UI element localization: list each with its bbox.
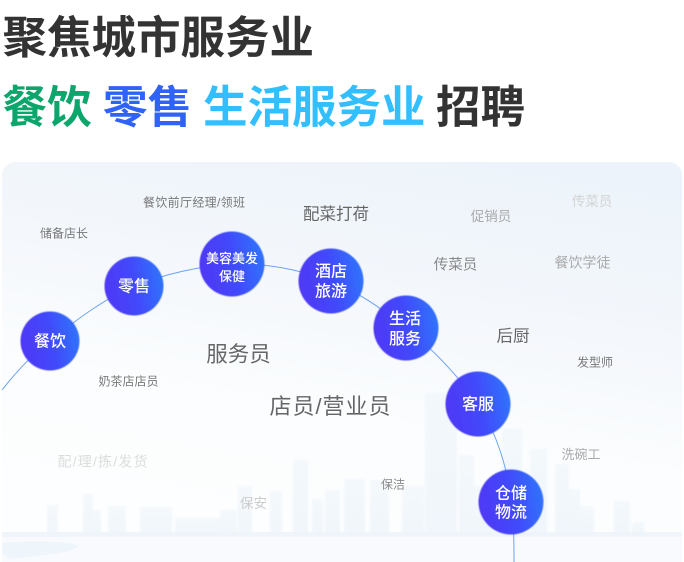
node: warehousing and logistics: [478, 470, 544, 534]
label: warehouse picking and shipping: 配/理/拣/发货: [58, 454, 148, 470]
node: life services: 服务: [389, 330, 421, 348]
node: retail: 零售: [118, 278, 150, 296]
label: catering floor manager: 餐饮前厅经理/领班: [143, 194, 245, 210]
label: sales promoter: 促销员: [471, 209, 511, 224]
illustration: city skyline: [47, 393, 644, 535]
label: milk tea shop staff: 奶茶店店员: [98, 374, 159, 388]
node: life services: [374, 296, 438, 360]
node: beauty and wellness: [200, 232, 264, 296]
node: life services: 生活: [389, 310, 421, 328]
node: retail: [104, 256, 164, 316]
node: customer service: [446, 372, 510, 436]
label: kitchen prep: 配菜打荷: [303, 204, 369, 224]
node: customer service: 客服: [462, 394, 494, 414]
heading word: life services: 生活服务业: [203, 84, 426, 132]
label: hairstylist: 发型师: [577, 354, 613, 370]
job labels: [40, 194, 613, 511]
title: line one: 聚焦城市服务业: [2, 14, 314, 63]
node: beauty and wellness: 保健: [219, 269, 245, 284]
node: warehousing and logistics: 物流: [495, 504, 527, 522]
label: store manager trainee: 储备店长: [40, 226, 88, 240]
panel: background: [2, 162, 682, 562]
illustration: waterfront ground: [2, 532, 682, 562]
title: line two: [2, 84, 525, 132]
heading word: retail: 零售: [103, 84, 192, 132]
label: food runner, faded: 传菜员: [572, 194, 612, 209]
heading word: catering: 餐饮: [2, 84, 92, 132]
label: cleaner: 保洁: [381, 478, 405, 492]
label: dishwasher: 洗碗工: [561, 447, 601, 462]
label: catering apprentice: 餐饮学徒: [554, 254, 610, 270]
label: shop assistant: 店员/营业员: [270, 394, 390, 419]
heading word: recruiting: 招聘: [436, 84, 525, 132]
label: back kitchen: 后厨: [496, 326, 530, 346]
label: food runner: 传菜员: [434, 256, 477, 274]
node: hotel and travel: 酒店: [315, 262, 347, 280]
node: catering: 餐饮: [34, 332, 66, 350]
node: hotel and travel: 旅游: [315, 282, 347, 300]
connector curve: [2, 264, 514, 562]
node: warehousing and logistics: 仓储: [495, 484, 527, 502]
node: hotel and travel: [298, 248, 364, 314]
node: catering: [20, 312, 80, 370]
label: security guard: 保安: [240, 496, 267, 511]
node: beauty and wellness: 美容美发: [206, 251, 258, 266]
label: waiter: 服务员: [206, 342, 271, 366]
